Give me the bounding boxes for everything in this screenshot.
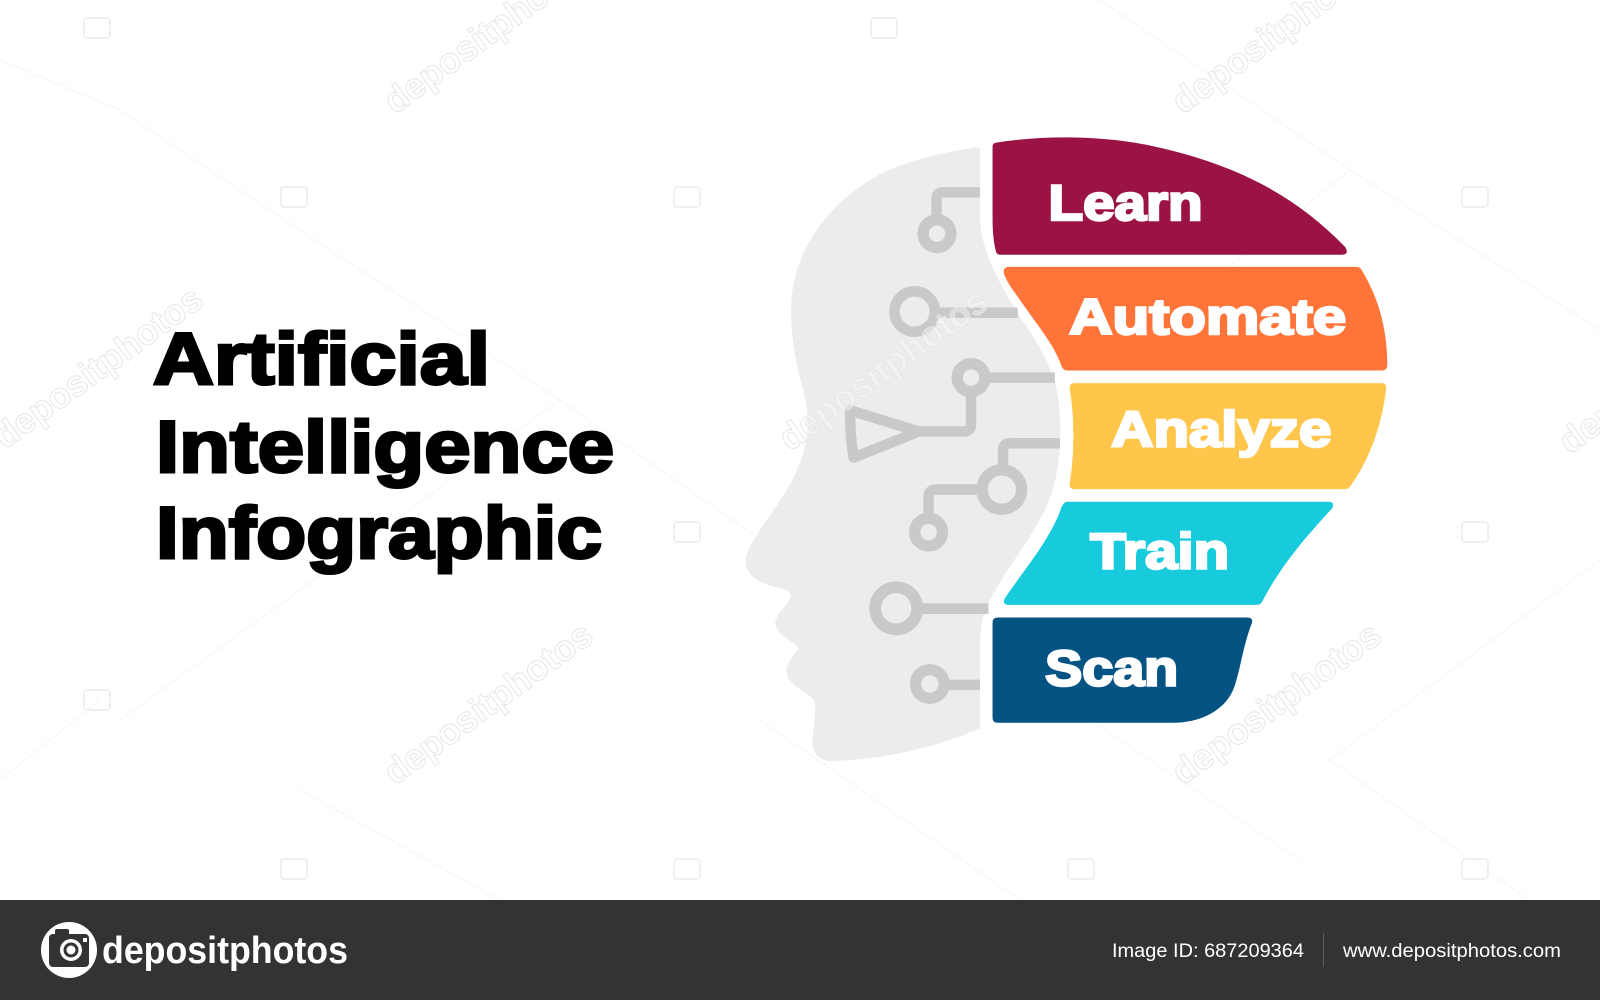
title: Intelligence xyxy=(156,407,614,488)
footer divider xyxy=(1323,933,1324,967)
title xyxy=(153,319,614,574)
icon: camera logo xyxy=(41,922,97,978)
circuit 1 xyxy=(923,192,980,248)
segment: Scan: Scan xyxy=(1045,640,1178,696)
segment: Automate xyxy=(1004,267,1387,370)
circuit 3 with triangle xyxy=(850,364,1055,458)
watermarks: depositphotos xyxy=(376,614,600,792)
watermarks: depositphotos xyxy=(771,280,995,458)
title: Infographic xyxy=(156,493,602,574)
segment: Train: Train xyxy=(1090,524,1229,580)
segment: Train xyxy=(1004,502,1333,605)
website: www.depositphotos.com xyxy=(1342,940,1561,962)
segment: Analyze: Analyze xyxy=(1111,402,1331,458)
brain segments xyxy=(993,137,1387,723)
segment: Automate: Automate xyxy=(1069,289,1346,345)
circuit 2 xyxy=(894,291,1018,332)
head silhouette xyxy=(746,147,1060,761)
segment: Scan xyxy=(993,618,1252,723)
segment: Analyze xyxy=(1070,383,1386,489)
title: Artificial xyxy=(153,319,490,400)
segment: Learn xyxy=(993,137,1347,255)
circuit traces xyxy=(850,192,1060,698)
segment: Learn: Learn xyxy=(1049,175,1203,231)
head illustration with circuits xyxy=(746,147,1060,761)
watermarks: depositphotos xyxy=(1164,614,1388,792)
watermark camera marks xyxy=(84,18,1488,879)
logo wordmark: depositphotos xyxy=(102,930,348,972)
circuit 5 xyxy=(875,587,988,629)
circuit 4 xyxy=(915,443,1060,546)
image id: Image ID: 687209364 xyxy=(1112,940,1304,962)
footer banner xyxy=(0,900,1600,1000)
circuit 6 xyxy=(916,670,980,698)
watermarks xyxy=(0,0,1600,792)
